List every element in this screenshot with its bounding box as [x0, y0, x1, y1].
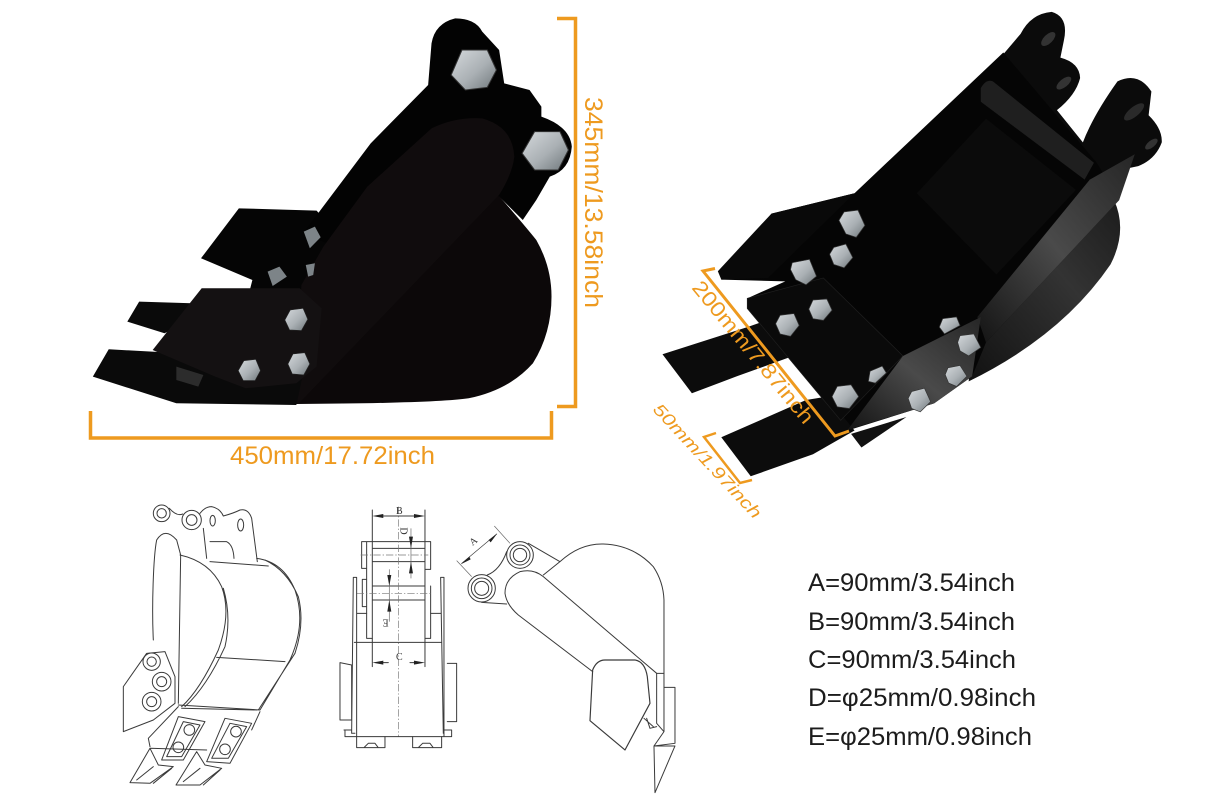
spec A: A=90mm/3.54inch — [808, 569, 1015, 597]
mounting ears — [986, 12, 1162, 176]
ears — [153, 505, 257, 562]
bowl back — [969, 200, 1120, 381]
photo: side view of bucket — [93, 18, 572, 405]
teeth points — [130, 748, 222, 785]
long side plate — [977, 154, 1135, 342]
cross tube — [981, 81, 1094, 180]
spec E: E=φ25mm/0.98inch — [808, 723, 1032, 751]
gusset plate — [848, 317, 981, 430]
upper tooth — [662, 319, 803, 393]
dimension: height label: 345mm/13.58inch — [579, 97, 607, 308]
centre lines — [357, 507, 432, 737]
dimension C: C — [396, 652, 403, 663]
teeth — [93, 302, 303, 405]
floor plate — [747, 278, 903, 420]
pin circles — [468, 542, 533, 602]
spec B: B=90mm/3.54inch — [808, 608, 1015, 636]
upper fin — [718, 193, 855, 280]
dimension B — [372, 506, 425, 542]
body backing silhouette — [721, 53, 1119, 431]
nuts and bolts — [776, 210, 981, 412]
small rear nuts — [268, 227, 321, 286]
second bolt — [522, 132, 568, 170]
dimension D: D — [398, 527, 409, 535]
dimension E — [383, 569, 391, 627]
plate bolts — [238, 308, 310, 381]
dimension: height bracket — [557, 18, 576, 406]
line drawing: isometric bucket — [123, 505, 301, 785]
lip and bolt — [644, 673, 675, 746]
dimension C — [372, 638, 425, 667]
side plate outline — [505, 571, 664, 673]
top bolt — [451, 50, 496, 90]
side plate — [153, 533, 181, 703]
feet — [357, 737, 442, 748]
side plate — [296, 118, 514, 403]
inner floor shading — [917, 119, 1076, 275]
dimension: tooth width label: 50mm/1.97inch — [649, 400, 765, 522]
dimension: width bracket — [90, 411, 552, 438]
under plate — [851, 417, 906, 447]
dimension D — [398, 527, 413, 578]
tooth — [654, 746, 675, 793]
tooth adapter highlight — [176, 367, 203, 387]
bowl — [296, 196, 552, 404]
specification list — [808, 569, 1036, 751]
shell — [178, 555, 301, 710]
line drawing: front elevation — [340, 506, 457, 748]
spec C: C=90mm/3.54inch — [808, 646, 1016, 674]
upper pins and ears — [362, 542, 431, 638]
side ear cluster — [123, 652, 175, 732]
link plate and bowl outline — [482, 543, 664, 673]
dimension: bucket width label: 200mm/7.87inch — [687, 277, 818, 429]
dimension: bucket width bracket — [703, 268, 849, 436]
front plate — [590, 660, 650, 750]
front plate — [153, 288, 322, 388]
dimension A: A — [468, 535, 481, 548]
line drawing: side elevation — [457, 526, 675, 793]
dimension A — [457, 526, 510, 577]
spec D: D=φ25mm/0.98inch — [808, 684, 1036, 712]
dimension B: B — [396, 506, 403, 517]
dimension E: E — [383, 616, 389, 627]
tooth adapters — [148, 707, 260, 763]
upper body and mounting ears — [303, 18, 572, 267]
dimension: tooth width bracket — [704, 433, 752, 483]
lower tooth — [721, 397, 855, 476]
ear holes — [1039, 30, 1159, 151]
bucket body — [340, 577, 457, 737]
rear side fin — [201, 208, 337, 293]
dimension: width label: 450mm/17.72inch — [230, 442, 435, 470]
photo: three-quarter view of bucket — [662, 12, 1162, 476]
